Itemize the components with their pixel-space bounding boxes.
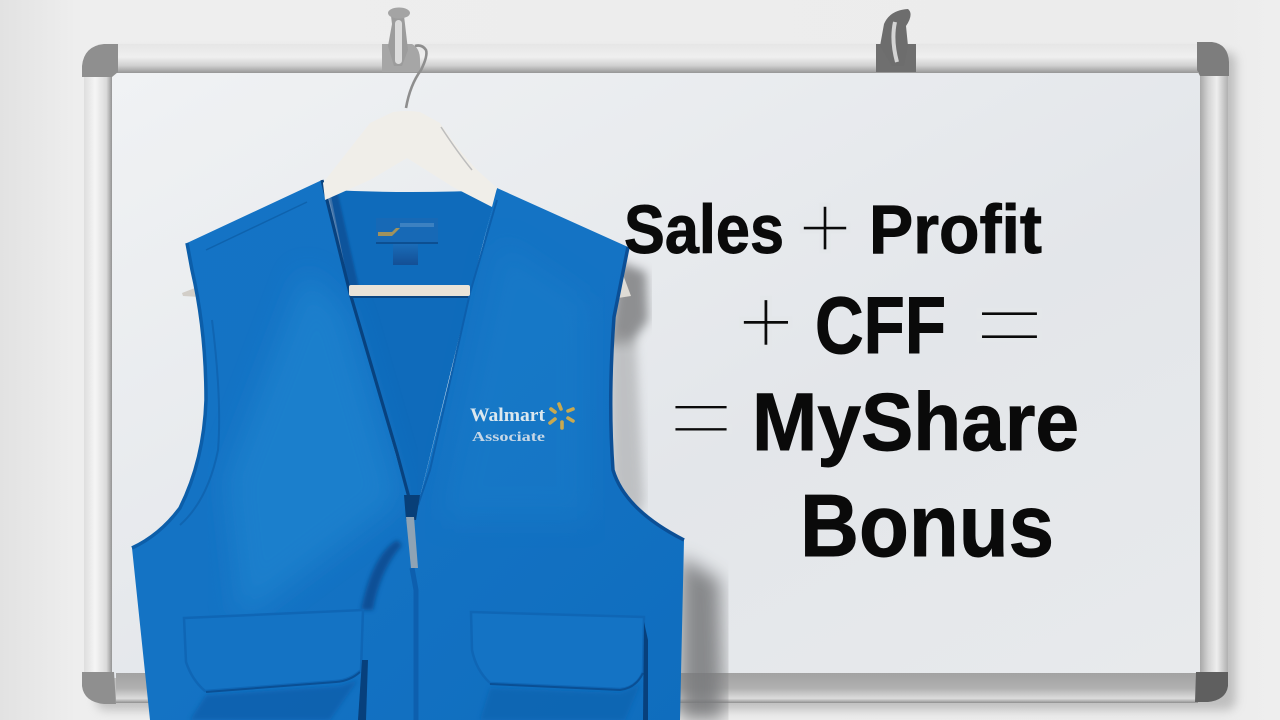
neck inner shadow [326, 190, 360, 293]
hanger bar ends behind vest [182, 272, 631, 298]
left pocket lower shadow [190, 680, 358, 720]
bottom-right corner cap [1195, 672, 1228, 702]
hanger crossbar [349, 285, 470, 296]
word: Profit: Profit [869, 191, 1042, 268]
neck label [376, 218, 438, 243]
word: Bonus: Bonus [800, 476, 1054, 575]
left pocket [184, 610, 368, 720]
word: CFF: CFF [815, 281, 946, 371]
top-left corner cap [82, 44, 118, 77]
bottom frame rail [116, 673, 1198, 703]
clip base [876, 44, 916, 72]
left pocket flap [184, 610, 363, 691]
zipper track [412, 568, 416, 720]
left hanger tip [182, 286, 200, 297]
shadow beside lower vest [680, 556, 724, 720]
clip arm [880, 9, 911, 66]
top frame rail [116, 44, 1198, 73]
zipper dark top [404, 495, 420, 520]
left armhole seam [180, 320, 219, 525]
left armhole binding [132, 243, 206, 548]
clip base [382, 44, 420, 72]
vest [132, 180, 684, 720]
right pocket side shadow [643, 622, 648, 720]
symbol: equals: = [973, 273, 1046, 376]
logo spark [550, 404, 573, 428]
shadow beside upper armhole [608, 262, 648, 345]
top-right corner cap [1197, 42, 1229, 76]
embroidered logo [470, 404, 573, 444]
hanger shoulders [323, 111, 497, 207]
formula text [624, 174, 1079, 575]
left frame rail [84, 76, 112, 672]
clip highlight [893, 22, 897, 62]
left pocket side shadow [358, 660, 368, 720]
right armhole binding [611, 247, 684, 540]
symbol: plus: + [797, 174, 853, 281]
right pocket [471, 612, 648, 720]
shadow beside armhole [608, 330, 644, 520]
word: MyShare: MyShare [752, 377, 1079, 468]
board surface [108, 68, 1204, 678]
neck label printed line [400, 223, 434, 227]
neck opening left edge [322, 180, 411, 505]
right pocket flap [471, 612, 644, 689]
symbol: plus: + [737, 266, 795, 378]
vest body [132, 180, 684, 720]
hanger [323, 46, 497, 207]
neck tag [393, 244, 418, 265]
neck label lower edge [376, 242, 438, 244]
logo wordmark: Walmart [470, 405, 546, 426]
clip arm [388, 16, 408, 66]
right frame rail [1200, 76, 1228, 672]
left chest highlight [225, 270, 400, 620]
vest shadows on board [608, 262, 724, 720]
vest inner back panel [330, 190, 497, 505]
left shoulder seam [206, 202, 307, 250]
right wall clip [876, 9, 916, 72]
hanger crossbar shadow [352, 295, 468, 298]
clip head [388, 8, 410, 18]
logo subline: Associate [472, 429, 545, 444]
right hanger tip [618, 272, 631, 298]
right chest highlight [440, 240, 590, 520]
left wall clip [382, 8, 420, 72]
hanger shadow edge [441, 127, 472, 170]
bottom-left corner cap [82, 672, 116, 704]
symbol: equals: = [667, 368, 735, 466]
right pocket bottom edge [490, 673, 643, 690]
fold shading near zipper [361, 540, 402, 610]
word: Sales: Sales [624, 191, 784, 268]
left pocket bottom edge [206, 672, 360, 692]
neck label gold mark [378, 228, 400, 236]
neck opening right edge [418, 200, 497, 505]
hanger hook wire [406, 46, 426, 108]
right pocket lower shadow [480, 685, 640, 720]
zipper pull [406, 517, 418, 568]
clip highlight [395, 20, 402, 64]
